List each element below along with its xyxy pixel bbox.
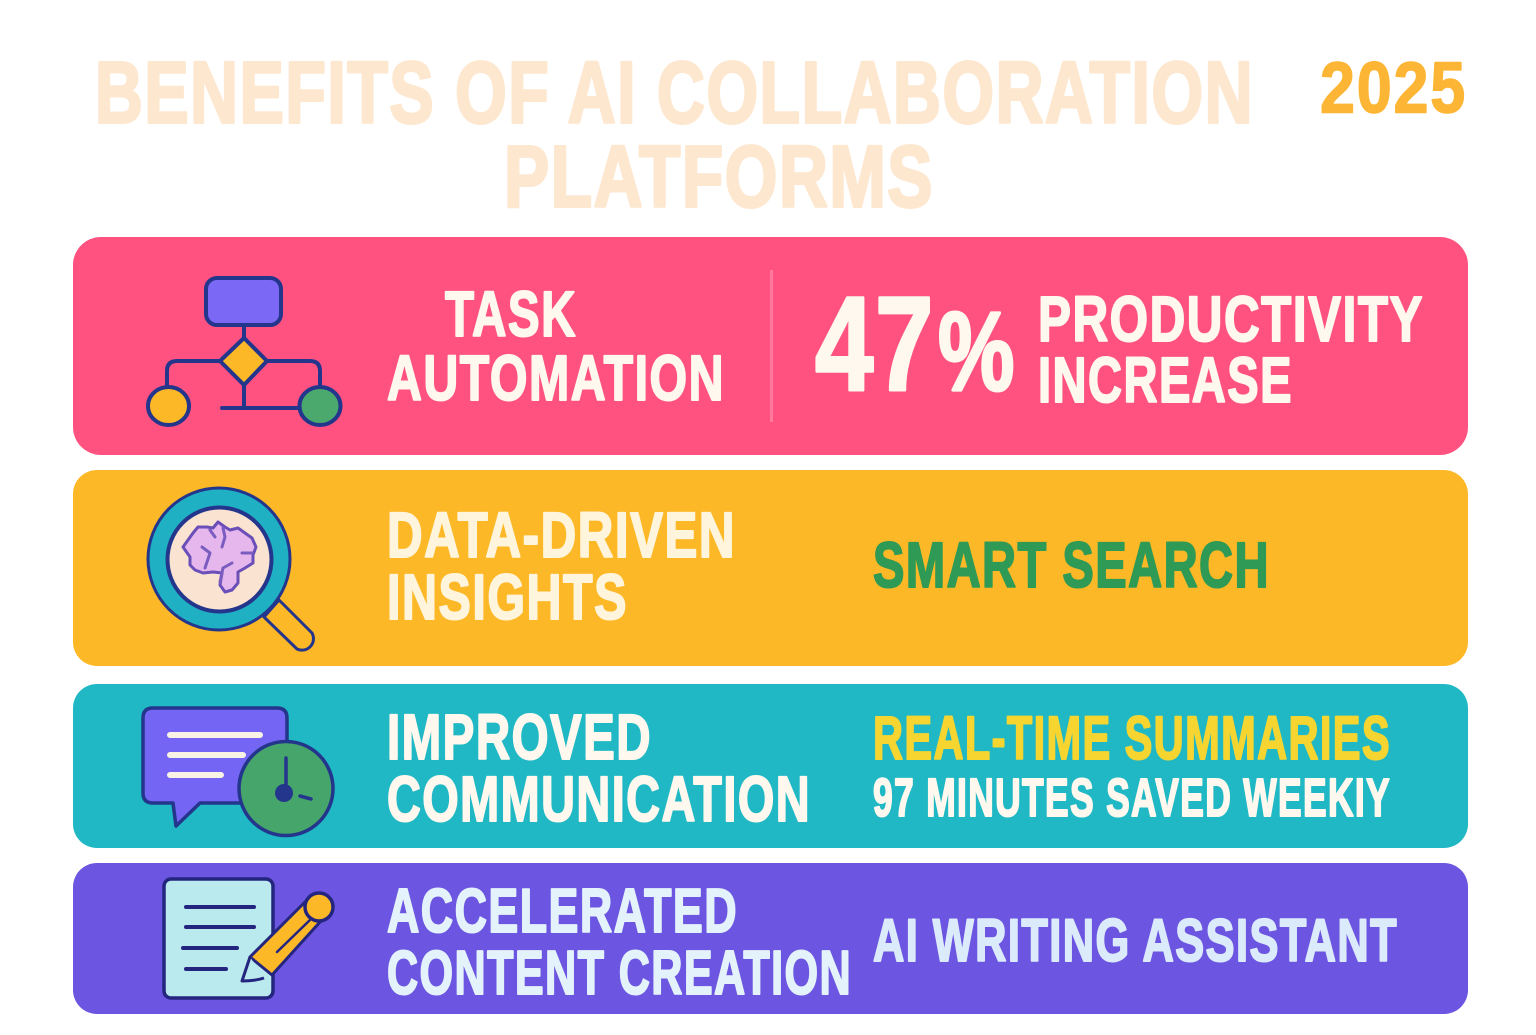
heading: task automation bbox=[387, 278, 725, 414]
panel: accelerated content creation bbox=[73, 863, 1468, 1014]
stat: 47 percent: 47 bbox=[815, 270, 935, 419]
title: PLATFORMS bbox=[504, 128, 934, 226]
heading: accelerated content creation: ACCELERATED bbox=[387, 877, 738, 946]
stat label: productivity increase: PRODUCTIVITY bbox=[1038, 283, 1424, 355]
heading: task automation: TASK bbox=[445, 278, 577, 350]
heading: accelerated content creation: CONTENT CREATION bbox=[387, 939, 852, 1008]
icon: document with pencil bbox=[164, 879, 333, 998]
stat label: productivity increase bbox=[1038, 283, 1424, 416]
year label: 2025 bbox=[1320, 48, 1467, 128]
heading: data-driven insights: DATA-DRIVEN bbox=[387, 499, 736, 571]
heading: improved communication bbox=[387, 701, 811, 835]
heading: improved communication: IMPROVED bbox=[387, 701, 652, 773]
stat label: productivity increase: INCREASE bbox=[1038, 344, 1293, 416]
heading: data-driven insights: INSIGHTS bbox=[387, 561, 628, 633]
title bbox=[95, 44, 1254, 226]
stat: 47 percent: % bbox=[938, 289, 1016, 414]
icon: chat bubble with clock bbox=[143, 708, 333, 836]
heading: task automation: AUTOMATION bbox=[387, 342, 725, 414]
panel: task automation bbox=[73, 237, 1468, 455]
icon: workflow diagram bbox=[148, 278, 340, 425]
icon: magnifier with brain bbox=[148, 488, 313, 650]
feature: smart search: SMART SEARCH bbox=[873, 529, 1270, 601]
heading: data-driven insights bbox=[387, 499, 736, 633]
heading: accelerated content creation bbox=[387, 877, 852, 1008]
panel: improved communication bbox=[73, 684, 1468, 848]
heading: improved communication: COMMUNICATION bbox=[387, 763, 811, 835]
panel: data-driven insights bbox=[73, 470, 1468, 666]
